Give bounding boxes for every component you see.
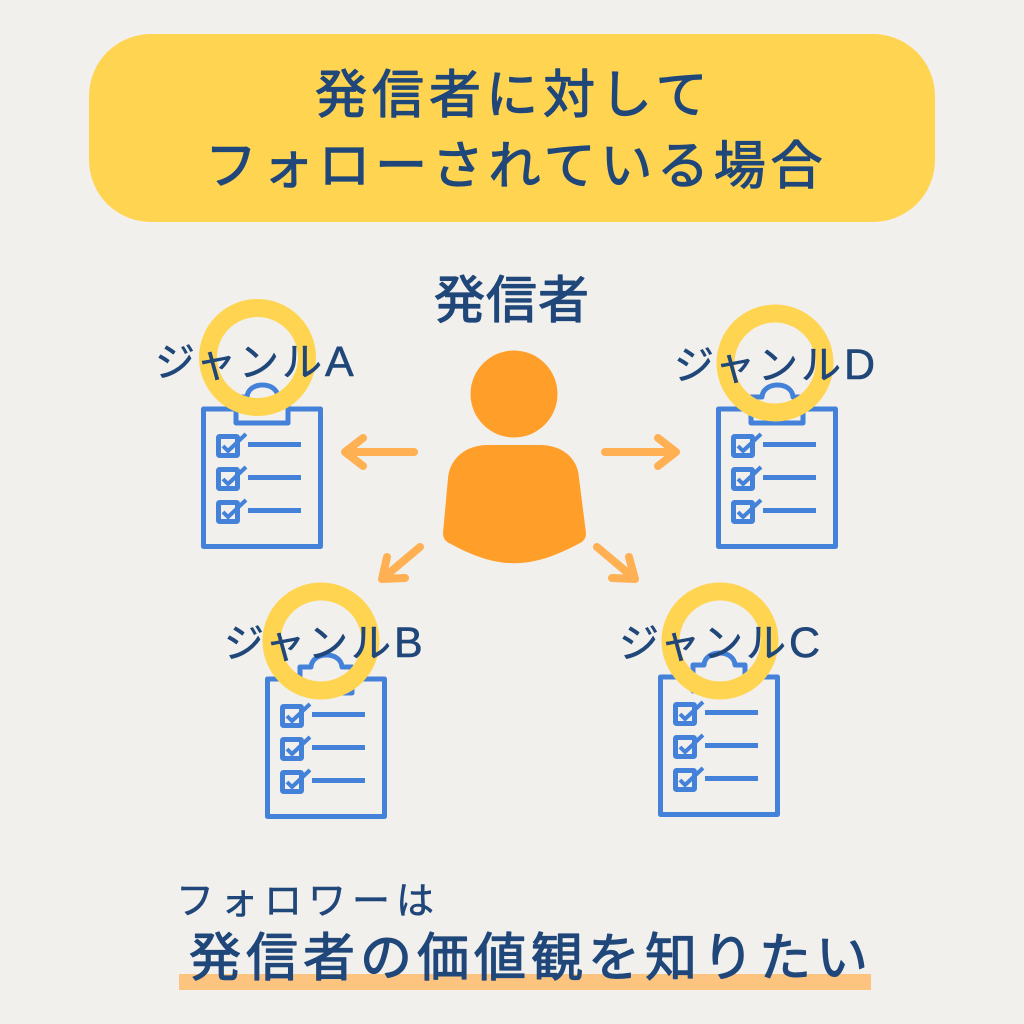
genre D group <box>674 314 875 546</box>
highlight circle C <box>670 592 770 690</box>
highlight circle A <box>208 308 307 407</box>
genre B group <box>224 592 423 816</box>
title banner <box>89 34 935 222</box>
arrow: to genre D <box>605 438 676 466</box>
highlight circle D <box>726 314 824 412</box>
genre A group <box>155 308 354 546</box>
label: genre A: ジャンルA <box>155 338 354 386</box>
label: genre D: ジャンルD <box>674 341 875 389</box>
sender label: 発信者 <box>434 272 590 329</box>
icon: sender person <box>443 350 586 563</box>
icon: clipboard B <box>268 655 384 816</box>
text: want to know the sender's values: 発信者の価値観を知りたい <box>189 930 873 988</box>
label: genre C: ジャンルC <box>619 619 820 667</box>
highlight circle B <box>272 592 370 690</box>
genre C group <box>619 592 820 814</box>
arrow: to genre A <box>345 438 414 466</box>
title text line 1: 発信者に対して <box>315 67 712 125</box>
text: followers: フォロワーは <box>176 881 440 923</box>
arrow: to genre C <box>597 547 635 579</box>
label: genre B: ジャンルB <box>224 619 423 667</box>
icon: clipboard C <box>660 653 778 814</box>
icon: clipboard D <box>718 385 836 546</box>
icon: clipboard A <box>204 385 320 546</box>
title text line 2: フォローされている場合 <box>205 138 827 196</box>
highlight underline <box>179 974 871 990</box>
arrow: to genre B <box>382 547 420 579</box>
